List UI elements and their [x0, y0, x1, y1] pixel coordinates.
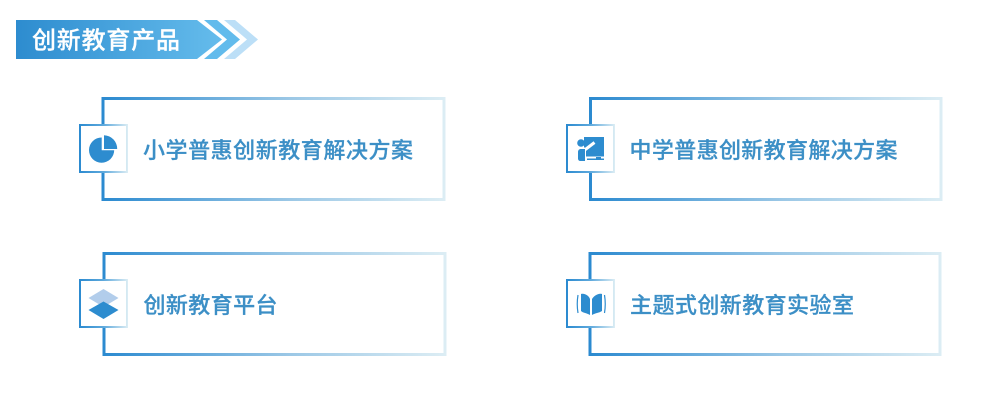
chevron: middle: [204, 20, 240, 59]
icon box: [567, 280, 614, 327]
panel frame: [590, 98, 941, 200]
panel: education platform: [80, 254, 445, 354]
raised arm: [584, 142, 594, 150]
head: [577, 139, 585, 147]
banner arrow shape: [16, 20, 222, 59]
icon box: [567, 125, 614, 172]
label: 主题式创新教育实验室: [630, 293, 854, 318]
panel: primary school solution: [80, 98, 444, 200]
heading: 创新教育产品: [32, 28, 180, 54]
label: 中学普惠创新教育解决方案: [630, 138, 898, 163]
blackboard: [584, 137, 604, 156]
header banner: [16, 20, 258, 59]
icon box: [80, 125, 127, 172]
panel frame: [104, 254, 445, 354]
label: 创新教育平台: [144, 293, 278, 318]
panel frame: [103, 98, 444, 200]
icon: pie chart: [89, 135, 117, 163]
panel frame: [590, 254, 940, 354]
icon box: [80, 280, 127, 327]
icon: layers: [88, 289, 118, 319]
body: [578, 149, 585, 161]
panel: themed education lab: [567, 254, 940, 354]
icon: teacher at blackboard: [577, 137, 604, 161]
chevron: light: [224, 20, 258, 59]
panel: middle school solution: [567, 98, 941, 200]
icon: open book: [577, 294, 605, 315]
chalk tray: [587, 157, 604, 160]
label: 小学普惠创新教育解决方案: [143, 138, 413, 163]
